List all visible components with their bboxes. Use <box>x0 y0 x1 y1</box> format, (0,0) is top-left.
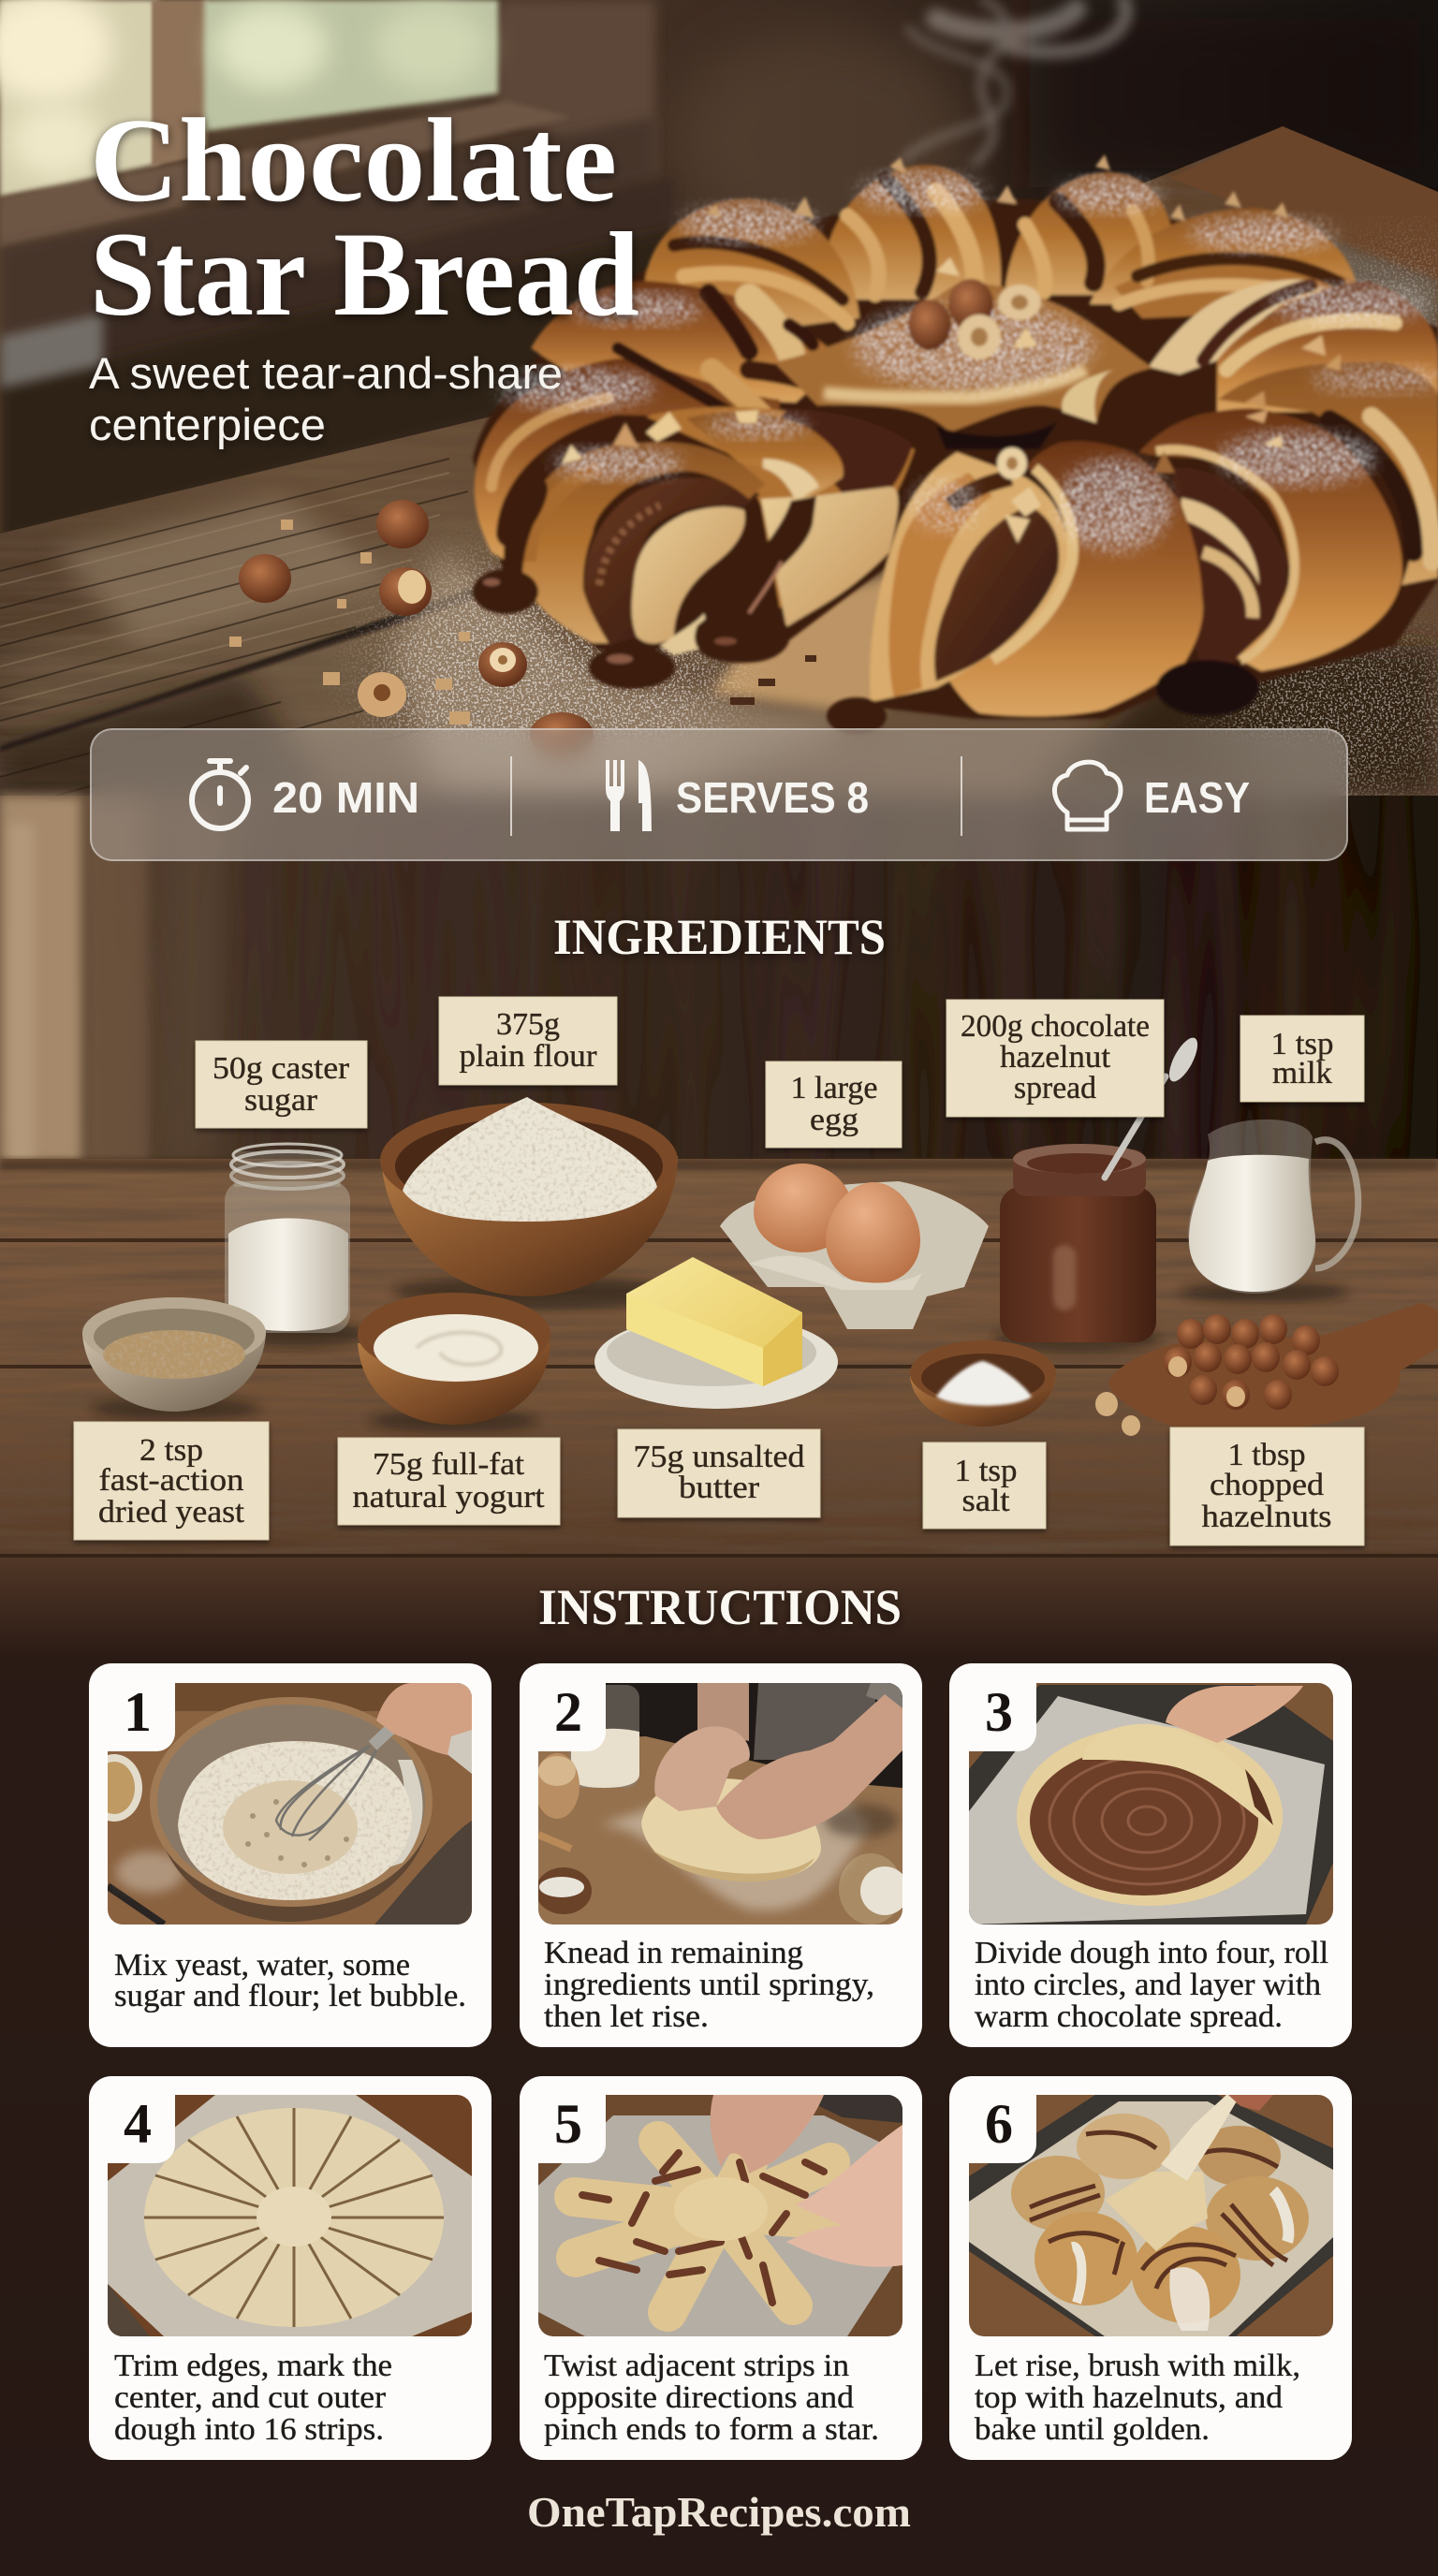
step 6 badge <box>969 2095 1036 2163</box>
label: salt: 1 tsp <box>955 1454 1017 1488</box>
stats bar <box>90 728 1348 861</box>
step 3 text: warm chocolate spread. <box>975 1999 1283 2034</box>
label: plain flour: 375g <box>496 1007 560 1042</box>
step 5 text: pinch ends to form a star. <box>544 2412 879 2447</box>
step 6 card <box>949 2076 1352 2460</box>
back lobes <box>644 165 1357 337</box>
label: chocolate hazelnut spread: hazelnut <box>1000 1040 1111 1075</box>
label: butter: butter <box>679 1471 760 1505</box>
ingredient: eggs in carton <box>720 1164 989 1329</box>
step 4 badge <box>108 2095 175 2163</box>
step 1 text: sugar and flour; let bubble. <box>114 1979 466 2013</box>
stat: servings: SERVES 8 <box>676 773 869 822</box>
step 1 photo <box>86 1683 472 1925</box>
label: yeast <box>74 1422 269 1540</box>
ingredient labels <box>74 997 1364 1545</box>
title: Chocolate <box>90 94 617 227</box>
title: Star Bread <box>90 208 639 341</box>
label: egg <box>766 1061 902 1148</box>
label: hazelnuts: chopped <box>1210 1468 1324 1502</box>
step 1 badge <box>108 1683 175 1751</box>
label: yogurt: natural yogurt <box>352 1480 545 1515</box>
label: yogurt: 75g full-fat <box>373 1447 525 1482</box>
title <box>90 94 639 341</box>
front right lobe <box>1139 408 1402 679</box>
subtitle: centerpiece <box>89 400 326 449</box>
label: butter <box>618 1429 820 1517</box>
step 4 text: center, and cut outer <box>114 2380 387 2415</box>
label: chocolate hazelnut spread: spread <box>1014 1071 1096 1105</box>
step 3 card <box>949 1663 1352 2047</box>
step 4 text <box>114 2349 392 2447</box>
steam <box>903 0 1126 164</box>
front big lobe <box>870 335 1341 716</box>
step 6 text: top with hazelnuts, and <box>975 2380 1283 2415</box>
label: hazelnuts: hazelnuts <box>1202 1500 1331 1534</box>
step 6 photo <box>969 2095 1333 2336</box>
step 2 text: ingredients until springy, <box>544 1968 874 2002</box>
step 3 text: Divide dough into four, roll <box>975 1936 1328 1970</box>
label: milk: milk <box>1272 1056 1332 1090</box>
label: chocolate hazelnut spread: 200g chocolate <box>961 1009 1150 1044</box>
step 5 badge <box>538 2095 606 2163</box>
heading: ingredients: INGREDIENTS <box>553 909 886 965</box>
ingredient: yeast bowl <box>82 1297 266 1420</box>
label: hazelnuts <box>1170 1427 1364 1545</box>
subtitle: A sweet tear-and-share <box>89 348 563 398</box>
ingredient: sugar jar <box>225 1144 365 1347</box>
label: yeast: 2 tsp <box>139 1433 203 1468</box>
ingredient: hazelnuts on board <box>1095 1303 1438 1436</box>
step 2 card <box>520 1663 922 2047</box>
footer site name: OneTapRecipes.com <box>527 2488 911 2536</box>
middle flank lobes <box>475 348 1438 585</box>
step 1 text: Mix yeast, water, some <box>114 1948 410 1983</box>
bread dark underside <box>473 198 1438 719</box>
scattered hazelnuts <box>229 500 816 757</box>
star bread <box>473 154 1438 735</box>
step 4 text: Trim edges, mark the <box>114 2349 392 2383</box>
step 6 text: bake until golden. <box>975 2412 1210 2447</box>
step 4 text: dough into 16 strips. <box>114 2412 384 2447</box>
step 6 number: 6 <box>985 2093 1013 2155</box>
step 3 text <box>975 1936 1328 2034</box>
upper flank lobes <box>531 279 1438 412</box>
label: egg: 1 large <box>790 1071 878 1105</box>
step 1 number: 1 <box>124 1681 152 1743</box>
step 2 badge <box>538 1683 606 1751</box>
step 5 photo <box>538 2095 902 2336</box>
center star <box>774 257 1152 449</box>
label: milk <box>1240 1016 1364 1102</box>
step 3 photo <box>969 1683 1333 1925</box>
step 2 text: Knead in remaining <box>544 1936 803 1970</box>
hero table <box>0 126 1438 796</box>
label: hazelnuts: 1 tbsp <box>1228 1438 1305 1472</box>
step 5 text <box>544 2349 879 2447</box>
spoon <box>1105 1033 1203 1178</box>
step 1 card <box>86 1663 492 2047</box>
step 5 text: opposite directions and <box>544 2380 854 2415</box>
label: caster sugar <box>196 1041 367 1128</box>
ingredients backdrop <box>0 796 1438 1657</box>
ingredient: butter on plate <box>594 1257 838 1409</box>
step 2 number: 2 <box>554 1681 582 1743</box>
step 4 photo <box>108 2095 472 2336</box>
label: caster sugar: 50g caster <box>213 1051 350 1086</box>
step 3 number: 3 <box>985 1681 1013 1743</box>
step 5 text: Twist adjacent strips in <box>544 2349 849 2383</box>
icon: fork and knife <box>606 760 652 831</box>
ingredient: yogurt bowl <box>358 1293 550 1432</box>
step 6 text <box>975 2349 1300 2447</box>
step 2 photo <box>535 1683 909 1925</box>
step 6 text: Let rise, brush with milk, <box>975 2349 1300 2383</box>
label: milk: 1 tsp <box>1271 1027 1333 1061</box>
hero wall and window <box>0 0 1438 534</box>
label: plain flour: plain flour <box>459 1039 597 1074</box>
ingredient: salt bowl <box>910 1340 1056 1427</box>
label: yeast: dried yeast <box>98 1495 245 1530</box>
label: salt: salt <box>962 1484 1010 1518</box>
heading: instructions: INSTRUCTIONS <box>538 1579 902 1635</box>
step 5 card <box>520 2076 922 2460</box>
front left lobe <box>517 407 915 655</box>
label: yeast: fast-action <box>99 1463 243 1498</box>
ingredient: milk jug <box>1180 1120 1358 1303</box>
step 2 text <box>544 1936 874 2034</box>
icon: stopwatch <box>192 761 248 828</box>
label: yogurt <box>338 1438 560 1525</box>
label: salt <box>923 1442 1046 1529</box>
ingredient: flour bowl <box>380 1097 678 1309</box>
label: plain flour <box>439 997 617 1085</box>
hazelnut crumbs on bread <box>707 154 1288 221</box>
step 3 text: into circles, and layer with <box>975 1968 1321 2002</box>
label: egg: egg <box>810 1103 858 1137</box>
chocolate drips <box>473 480 1259 735</box>
label: butter: 75g unsalted <box>633 1440 805 1474</box>
step 4 card <box>89 2076 492 2460</box>
ingredient: chocolate spread jar <box>992 1033 1203 1352</box>
step 4 number: 4 <box>124 2093 152 2155</box>
step 5 number: 5 <box>554 2093 582 2155</box>
step 1 text <box>114 1948 466 2013</box>
label: chocolate hazelnut spread <box>946 1000 1164 1117</box>
step 3 badge <box>969 1683 1036 1751</box>
hero photo <box>0 0 1438 796</box>
subtitle <box>89 348 563 449</box>
stat: difficulty: EASY <box>1144 773 1250 822</box>
step 2 text: then let rise. <box>544 1999 709 2034</box>
page background <box>0 1554 1438 2576</box>
stat: time: 20 MIN <box>272 773 419 822</box>
label: caster sugar: sugar <box>244 1083 318 1118</box>
icon: chef hat <box>1054 762 1121 829</box>
